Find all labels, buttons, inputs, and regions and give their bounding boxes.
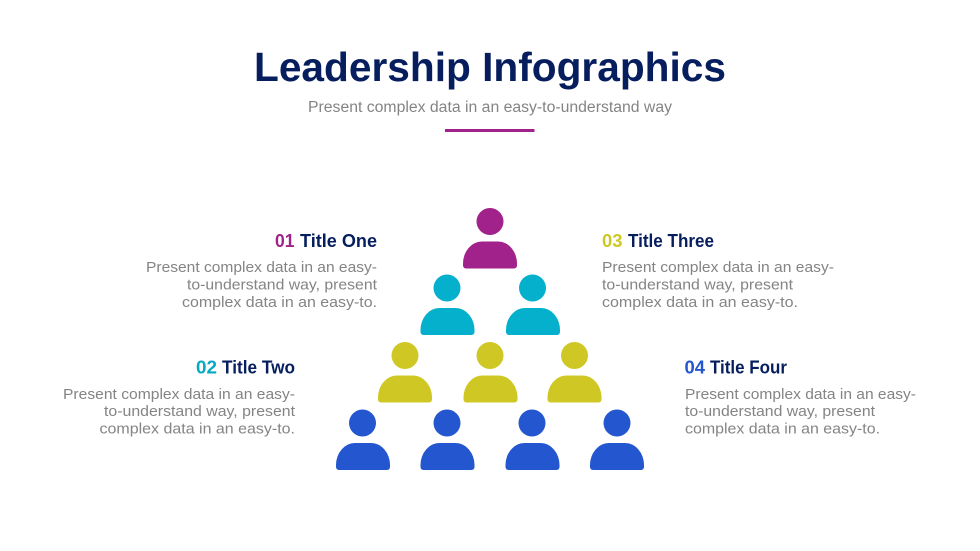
row 4: blue people (336, 410, 644, 470)
text block: 03 Title Three: to-understand way, present (602, 276, 794, 294)
row 1: purple person (463, 208, 517, 268)
text block: 04 Title Four (684, 358, 916, 438)
text block: 04 Title Four: complex data in an easy-to. (685, 420, 880, 438)
row 3: yellow people (378, 342, 602, 402)
text block: 04 Title Four: Title Four (710, 358, 787, 378)
text block: 03 Title Three: Present complex data in an easy- (602, 259, 834, 276)
text block: 04 Title Four: to-understand way, present (685, 403, 876, 420)
text block: 01 Title One: 01 (275, 231, 294, 251)
title: Leadership Infographics (254, 44, 726, 90)
text block: 03 Title Three (602, 231, 834, 311)
text block: 01 Title One: Title One (300, 231, 377, 251)
text block: 04 Title Four: Present complex data in an easy- (685, 386, 916, 403)
text block: 03 Title Three: Title Three (628, 231, 714, 251)
text block: 04 Title Four: 04 (684, 358, 705, 378)
text block: 02 Title Two: Title Two (222, 358, 295, 378)
text block: 01 Title One: complex data in an easy-to. (182, 294, 377, 311)
text block: 02 Title Two (63, 358, 296, 438)
text block: 01 Title One: Present complex data in an easy- (146, 259, 377, 276)
subtitle: Present complex data in an easy-to-understand way (308, 99, 672, 116)
people pyramid (336, 208, 644, 470)
text block: 01 Title One: to-understand way, present (187, 276, 378, 294)
text block: 02 Title Two: 02 (196, 358, 217, 378)
text block: 03 Title Three: 03 (602, 231, 622, 251)
text block: 02 Title Two: to-understand way, present (104, 403, 296, 420)
text block: 02 Title Two: Present complex data in an easy- (63, 386, 295, 403)
text block: 03 Title Three: complex data in an easy-to. (602, 294, 798, 311)
row 2: cyan people (420, 274, 560, 335)
title underline accent (445, 129, 534, 132)
text block: 01 Title One (146, 231, 378, 311)
text block: 02 Title Two: complex data in an easy-to. (100, 420, 295, 438)
